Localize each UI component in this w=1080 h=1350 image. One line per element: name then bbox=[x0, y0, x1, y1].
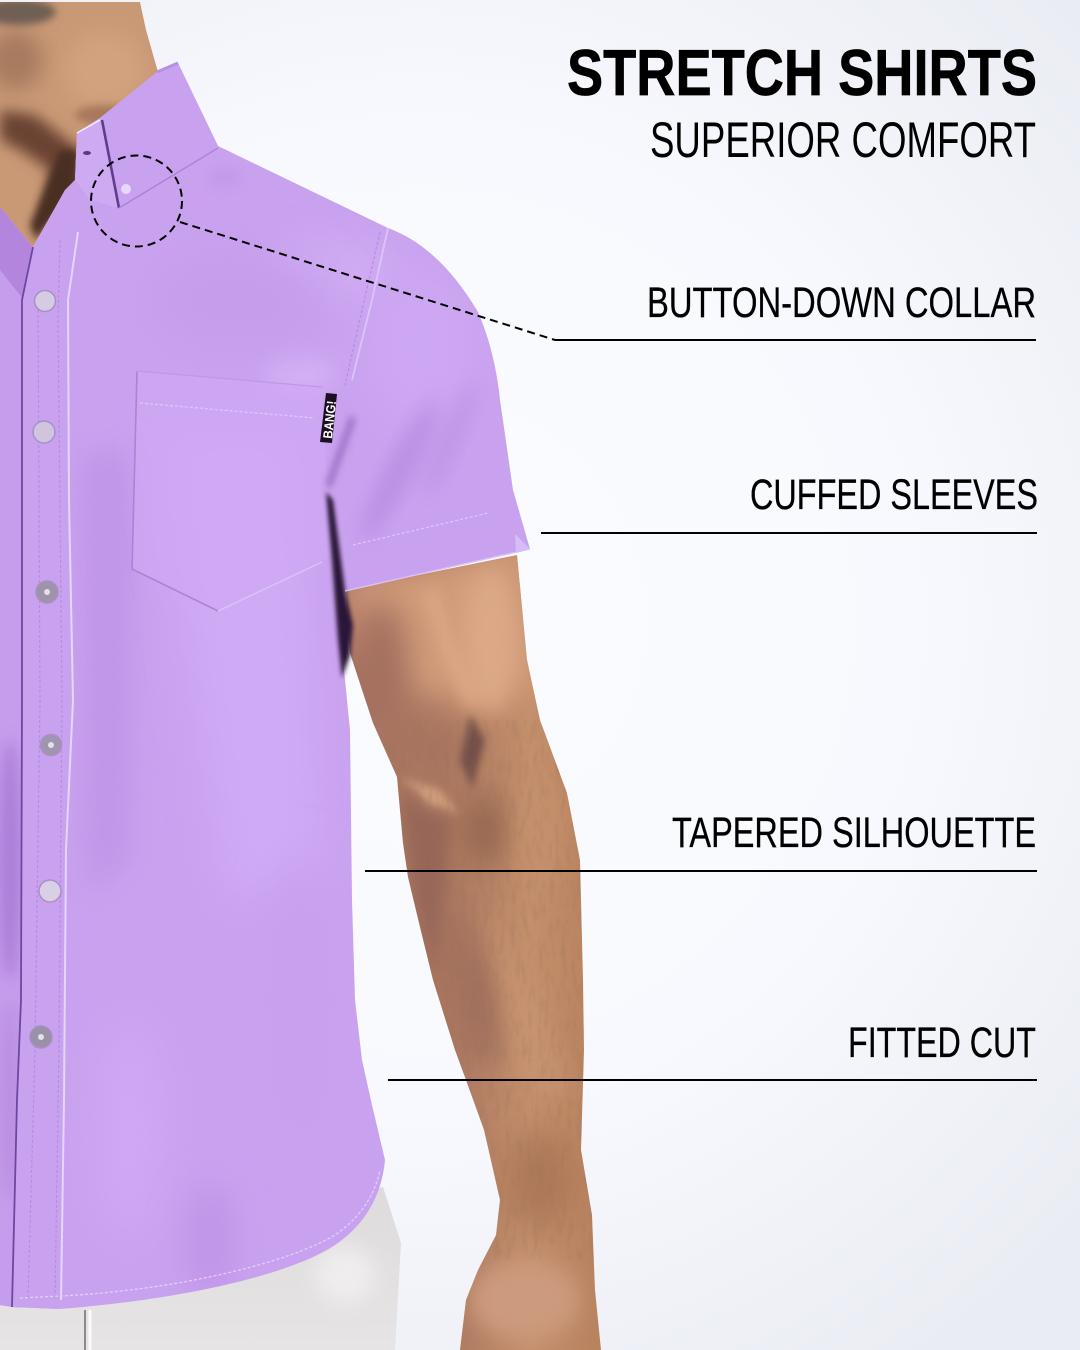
icon: collar button bbox=[121, 184, 131, 194]
collar bbox=[75, 63, 218, 208]
callout leader: tapered silhouette bbox=[365, 870, 1037, 872]
arm bbox=[340, 545, 610, 1350]
placket stitching bbox=[12, 232, 78, 1307]
sleeve seam and armpit fold bbox=[326, 228, 388, 678]
white trousers bbox=[0, 1187, 401, 1350]
callout leader: cuffed sleeves bbox=[541, 532, 1037, 534]
hem stitching bbox=[20, 1170, 380, 1298]
brand tag: BANG! bbox=[320, 400, 339, 439]
sleeve cuff bbox=[345, 513, 530, 591]
callout leader: button-down collar bbox=[180, 222, 1036, 340]
callout circle: collar button bbox=[91, 156, 182, 246]
purple shirt bbox=[0, 63, 530, 1310]
callout leader: fitted cut bbox=[388, 1079, 1037, 1081]
shirt buttons bbox=[30, 290, 62, 1048]
chest pocket bbox=[132, 371, 331, 611]
model neck and beard bbox=[0, 0, 170, 250]
